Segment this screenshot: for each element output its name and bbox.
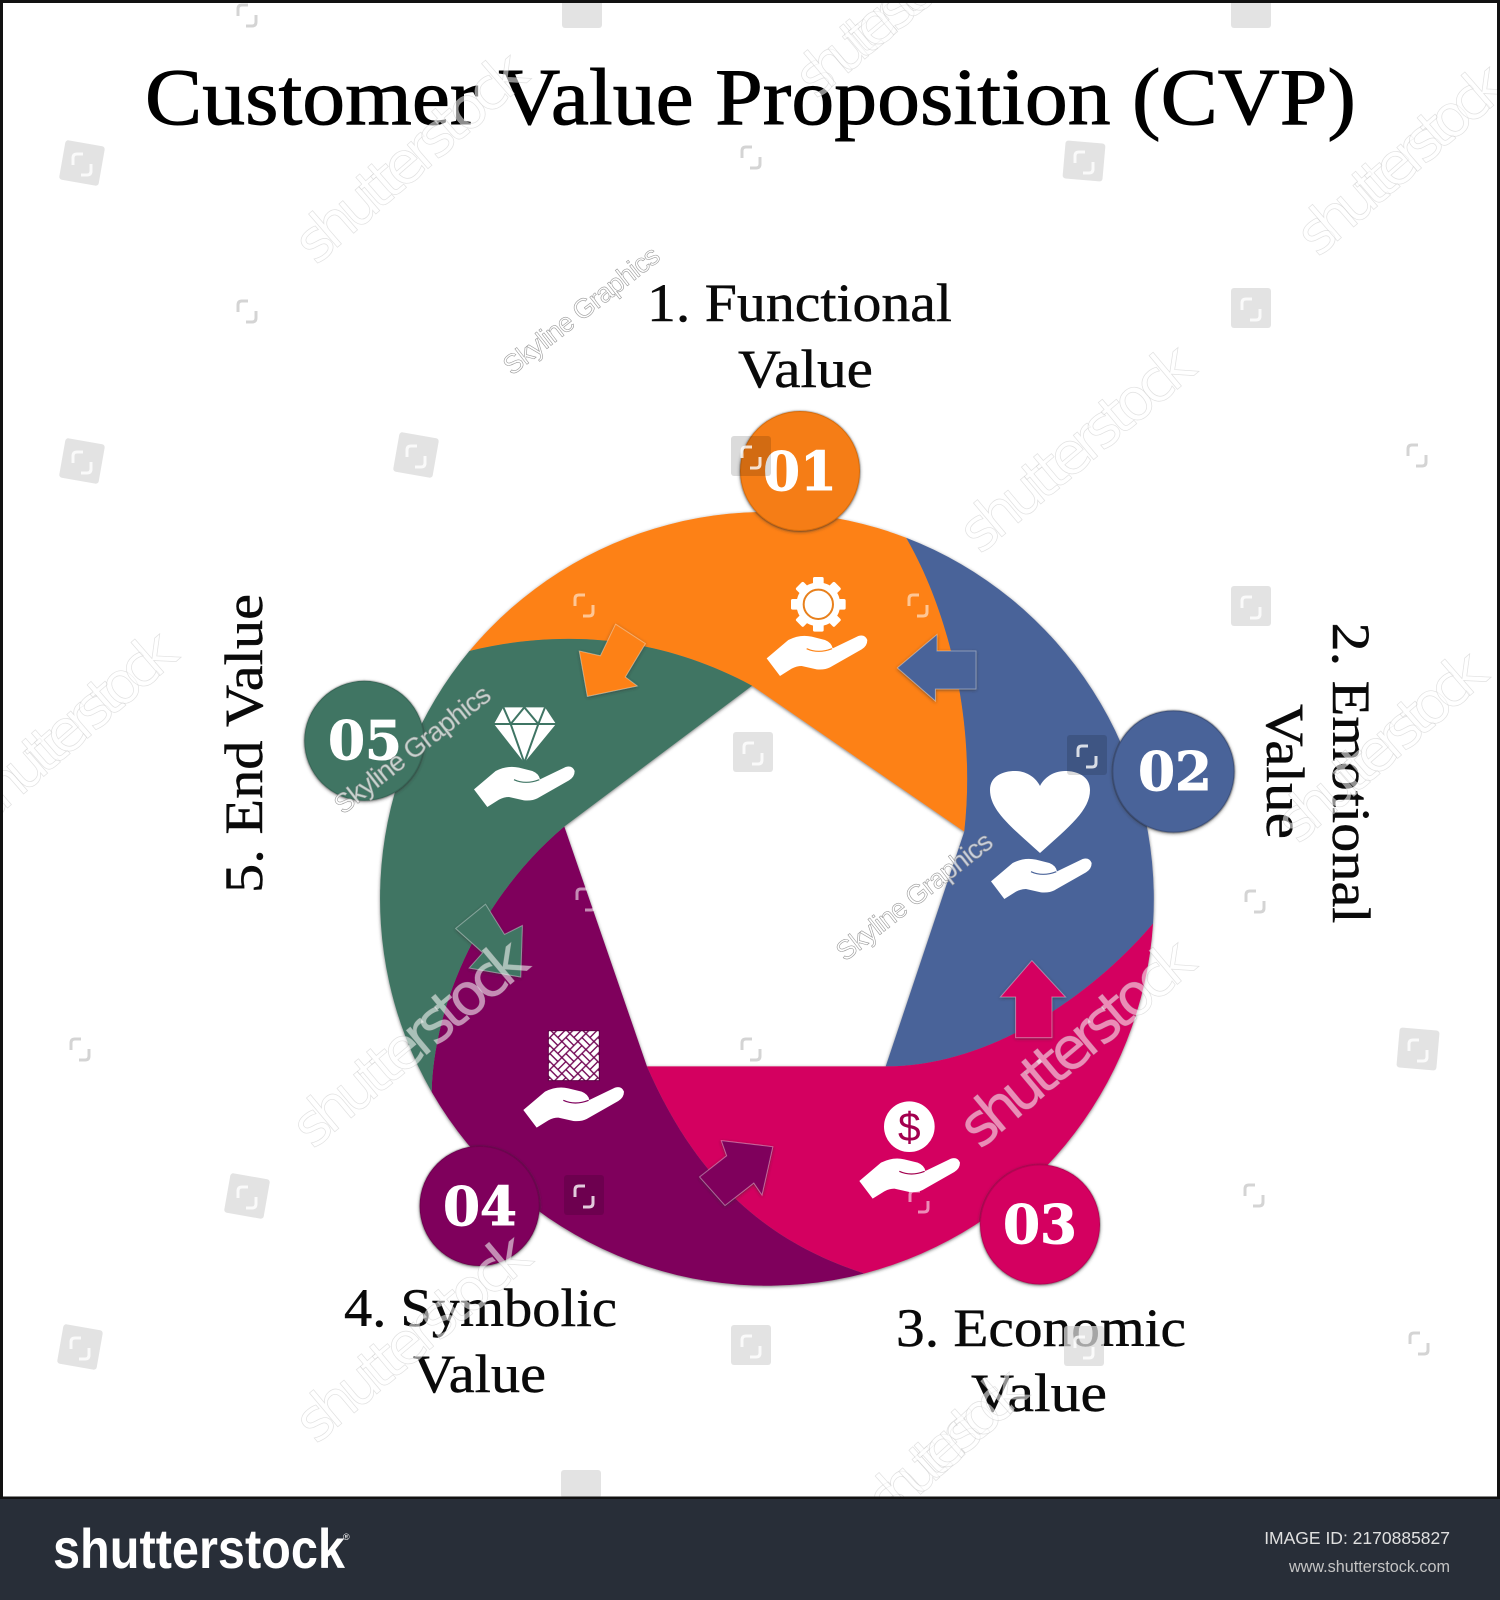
watermark overlay: shutterstock [281, 1220, 544, 1456]
badge: 03 [980, 1164, 1100, 1284]
watermark overlay: shutterstock [945, 330, 1208, 566]
icon: dollar coin in hand [859, 1101, 960, 1199]
label: economic value: 3. Economic [896, 1298, 1186, 1358]
icon: heart in hand [990, 771, 1092, 899]
watermark overlay: shutterstock [945, 925, 1208, 1161]
watermark overlay: shutterstock [854, 1354, 1041, 1532]
arrow: orange [579, 624, 645, 696]
watermark overlay: shutterstock [278, 925, 541, 1161]
label: symbolic value [344, 1278, 617, 1404]
arrow: blue [897, 634, 976, 701]
label: end value: 5. End Value [214, 594, 274, 893]
website: www.shutterstock.com [1288, 1558, 1450, 1576]
title: Customer Value Proposition (CVP) [145, 54, 1356, 142]
badge: 05 [304, 681, 424, 801]
label: emotional value: Value [1255, 704, 1315, 839]
watermark overlay: Skyline Graphics [830, 826, 998, 967]
badge: 02 [1112, 710, 1234, 832]
watermark overlay: shutterstock [1263, 636, 1500, 856]
label: economic value: Value [971, 1363, 1107, 1423]
watermark overlay: Skyline Graphics [497, 240, 665, 381]
badge: 02: 02 [1138, 741, 1212, 803]
badge: 01: 01 [763, 441, 837, 503]
label: functional value: 1. Functional [647, 273, 952, 333]
watermark overlay: Skyline Graphics [328, 679, 496, 820]
arrow: green [456, 904, 522, 977]
footer logo: shutterstock [53, 1517, 346, 1580]
registered mark: ® [343, 1532, 350, 1542]
label: functional value: Value [738, 339, 873, 399]
label: emotional value [1255, 622, 1381, 924]
icon: pattern block in hand [523, 1031, 624, 1128]
segment 5: end value [380, 639, 752, 1092]
segment 1: functional [469, 512, 967, 832]
label: symbolic value: 4. Symbolic [344, 1278, 617, 1338]
wheel: five interlocking segments [380, 512, 1154, 1286]
watermark overlay: shutterstock [281, 37, 541, 277]
footer bar [0, 1499, 1500, 1600]
segment 2: emotional [886, 538, 1154, 1066]
arrow: magenta [1000, 961, 1066, 1038]
icon: dollar coin in hand: $ [898, 1104, 921, 1150]
image id: IMAGE ID: 2170885827 [1264, 1528, 1450, 1548]
badge: 03: 03 [1003, 1194, 1077, 1256]
segment 3: economic [647, 923, 1153, 1273]
arrows between segments [456, 624, 1066, 1206]
label: emotional value: 2. Emotional [1321, 622, 1381, 924]
label: symbolic value: Value [413, 1344, 546, 1404]
badge: 04: 04 [443, 1176, 517, 1238]
badge: 01 [740, 411, 860, 531]
label: functional value [647, 273, 952, 399]
badge: 04 [420, 1146, 540, 1266]
icon: gear in hand [767, 577, 867, 676]
icon: diamond in hand [474, 707, 575, 807]
badge: 05: 05 [328, 710, 402, 772]
label: economic value [896, 1298, 1186, 1423]
arrow: purple [700, 1141, 773, 1206]
segment 4: symbolic [432, 827, 864, 1286]
